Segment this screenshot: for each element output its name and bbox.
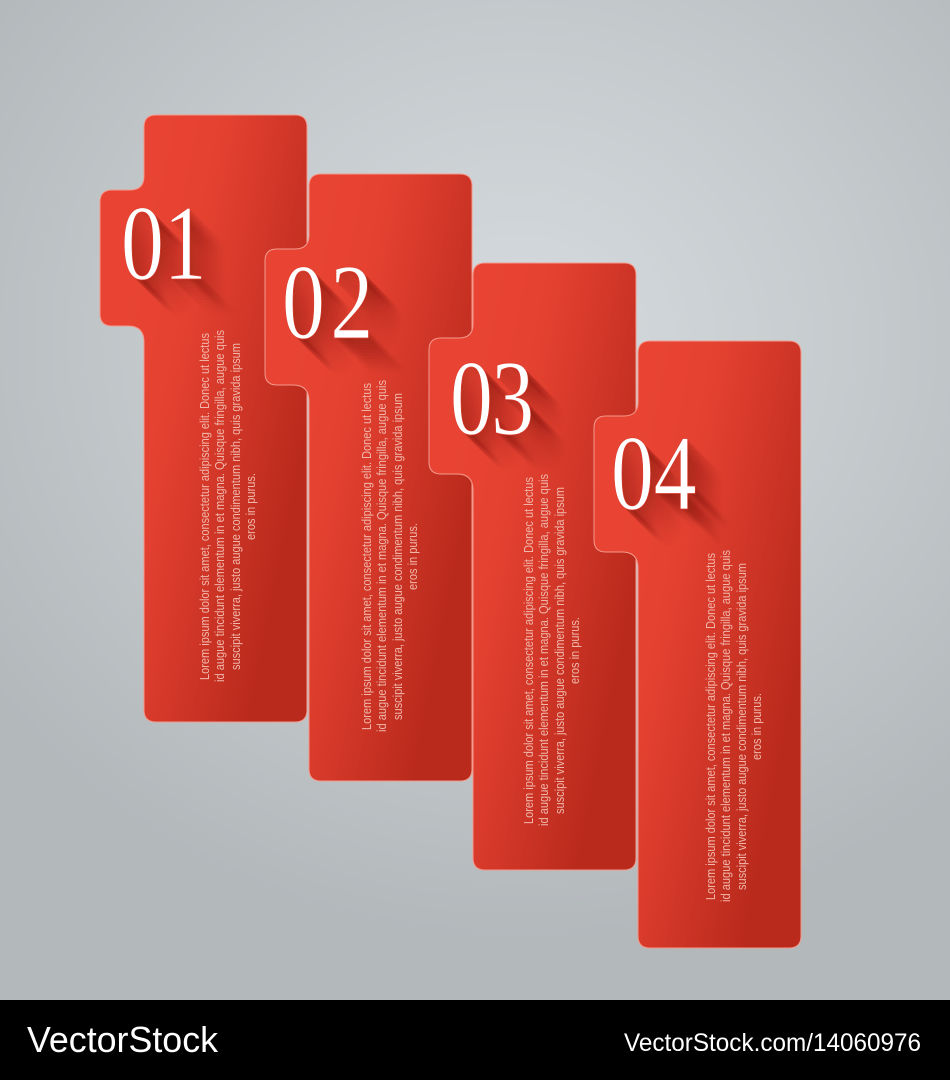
text block: card 1: eros in purus.	[243, 473, 258, 540]
text block: card 4	[703, 550, 764, 902]
footer brand: VectorStock	[27, 1019, 219, 1060]
panel: card 2	[265, 174, 472, 781]
text block: card 4: suscipit viverra, justo augue condimentum nibh, quis gravida ipsum	[734, 563, 749, 890]
text block: card 3: Lorem ipsum dolor sit amet, consectetur adipiscing elit. Donec ut lectus	[521, 477, 536, 824]
text block: card 2: eros in purus.	[405, 523, 420, 590]
text block: card 1: suscipit viverra, justo augue condimentum nibh, quis gravida ipsum	[228, 343, 243, 670]
number 02: 02	[282, 244, 379, 362]
number 03: 03	[450, 340, 532, 458]
footer image id: VectorStock.com/14060976	[624, 1029, 921, 1057]
text block: card 1: id augue tincidunt elementum in et magna. Quisque fringilla, augue quis	[212, 330, 227, 682]
text block: card 1	[197, 330, 258, 682]
footer bar	[0, 1000, 950, 1080]
text block: card 4: id augue tincidunt elementum in et magna. Quisque fringilla, augue quis	[718, 550, 733, 902]
panel: card 1	[100, 115, 307, 722]
number 01: 01	[121, 185, 207, 303]
text block: card 2: suscipit viverra, justo augue condimentum nibh, quis gravida ipsum	[390, 393, 405, 720]
panel: card 3	[429, 263, 636, 870]
text block: card 2: Lorem ipsum dolor sit amet, consectetur adipiscing elit. Donec ut lectus	[359, 383, 374, 730]
text block: card 2	[359, 380, 420, 732]
text block: card 4: Lorem ipsum dolor sit amet, consectetur adipiscing elit. Donec ut lectus	[703, 553, 718, 900]
text block: card 3: suscipit viverra, justo augue condimentum nibh, quis gravida ipsum	[552, 487, 567, 814]
number 04: 04	[611, 415, 697, 533]
text block: card 3	[521, 474, 582, 826]
text block: card 3: id augue tincidunt elementum in et magna. Quisque fringilla, augue quis	[536, 474, 551, 826]
text block: card 1: Lorem ipsum dolor sit amet, consectetur adipiscing elit. Donec ut lectus	[197, 333, 212, 680]
text block: card 2: id augue tincidunt elementum in et magna. Quisque fringilla, augue quis	[374, 380, 389, 732]
text block: card 4: eros in purus.	[749, 693, 764, 760]
panel: card 4	[594, 341, 801, 948]
text block: card 3: eros in purus.	[567, 617, 582, 684]
